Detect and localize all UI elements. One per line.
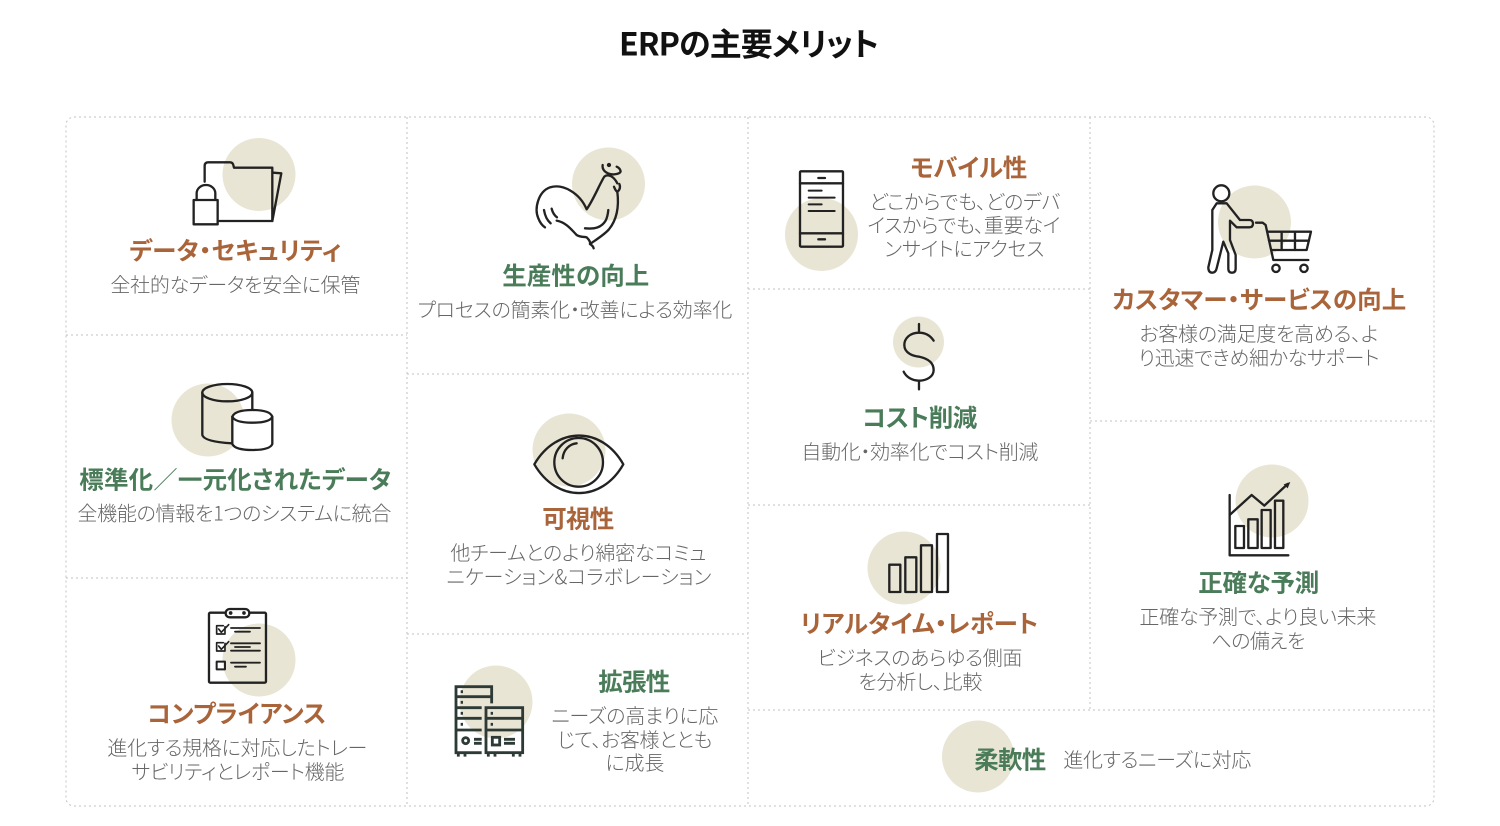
panel: compliance — [107, 609, 367, 785]
icon: growth chart — [1230, 464, 1308, 555]
description: に成長 — [605, 747, 664, 776]
description: じて、お客様ととも — [557, 724, 712, 753]
dashed grid frame — [66, 117, 1434, 806]
heading: 生産性の向上 — [502, 257, 649, 292]
description — [551, 700, 718, 776]
description: サビリティとレポート機能 — [131, 756, 344, 785]
title: ERPの主要メリット — [619, 20, 879, 66]
heading: コスト削減 — [862, 399, 978, 434]
heading: コンプライアンス — [147, 695, 326, 730]
description: 進化する規格に対応したトレー — [107, 732, 367, 761]
description: を分析し、比較 — [858, 666, 982, 695]
description: 自動化・効率化でコスト削減 — [801, 436, 1038, 465]
icon: rooster — [537, 148, 645, 248]
heading: 正確な予測 — [1198, 564, 1319, 599]
description — [867, 186, 1060, 262]
description: お客様の満足度を高める、よ — [1139, 318, 1378, 347]
panel: customer service — [1112, 185, 1406, 371]
description — [1138, 318, 1379, 371]
description: 進化するニーズに対応 — [1063, 744, 1251, 773]
description: ニーズの高まりに応 — [551, 700, 718, 729]
description — [446, 537, 712, 590]
panel: data security — [110, 138, 360, 298]
icon: mobile phone — [785, 171, 858, 271]
icon: folder with padlock — [194, 138, 296, 224]
description: 全社的なデータを安全に保管 — [110, 269, 360, 298]
icon: dollar sign — [893, 316, 944, 389]
description: イスからでも、重要なイ — [867, 210, 1060, 238]
icon: person with shopping cart — [1208, 185, 1311, 273]
decorative circle — [942, 720, 1014, 792]
description: 他チームとのより綿密なコミュ — [450, 537, 706, 566]
description: への備えを — [1211, 625, 1305, 654]
heading: 可視性 — [542, 500, 614, 535]
icon: server racks — [456, 666, 532, 757]
description: ビジネスのあらゆる側面 — [817, 642, 1022, 671]
description: ンサイトにアクセス — [884, 233, 1044, 262]
description — [107, 732, 367, 785]
heading: カスタマー・サービスの向上 — [1112, 281, 1406, 316]
heading: モバイル性 — [910, 149, 1027, 184]
panel: mobility — [785, 149, 1060, 271]
heading: リアルタイム・レポート — [800, 605, 1038, 640]
panel: standardized data — [77, 384, 391, 526]
panel: visibility — [446, 414, 712, 590]
description: どこからでも、どのデバ — [869, 186, 1060, 215]
icon: clipboard checklist — [209, 609, 296, 696]
icon: bar chart — [868, 532, 948, 604]
description — [1139, 601, 1376, 654]
heading: データ・セキュリティ — [129, 232, 341, 267]
panel: accurate forecasting — [1139, 464, 1376, 654]
description: プロセスの簡素化・改善による効率化 — [417, 294, 732, 323]
panel: real-time reports — [800, 532, 1038, 695]
icon: database cylinders — [172, 384, 272, 456]
description: 全機能の情報を1つのシステムに統合 — [77, 498, 391, 526]
panel: scalability — [456, 663, 718, 776]
panel: flexibility — [942, 720, 1251, 792]
panel: cost reduction — [801, 316, 1038, 465]
icon: eye — [532, 414, 623, 493]
heading: 拡張性 — [598, 663, 670, 698]
heading: 柔軟性 — [974, 741, 1046, 776]
description: り迅速できめ細かなサポート — [1138, 342, 1379, 371]
description: ニケーション&コラボレーション — [446, 561, 712, 590]
description: 正確な予測で、より良い未来 — [1139, 601, 1376, 630]
panel: productivity — [417, 148, 732, 323]
heading: 標準化／一元化されたデータ — [79, 461, 391, 496]
description — [817, 642, 1022, 695]
